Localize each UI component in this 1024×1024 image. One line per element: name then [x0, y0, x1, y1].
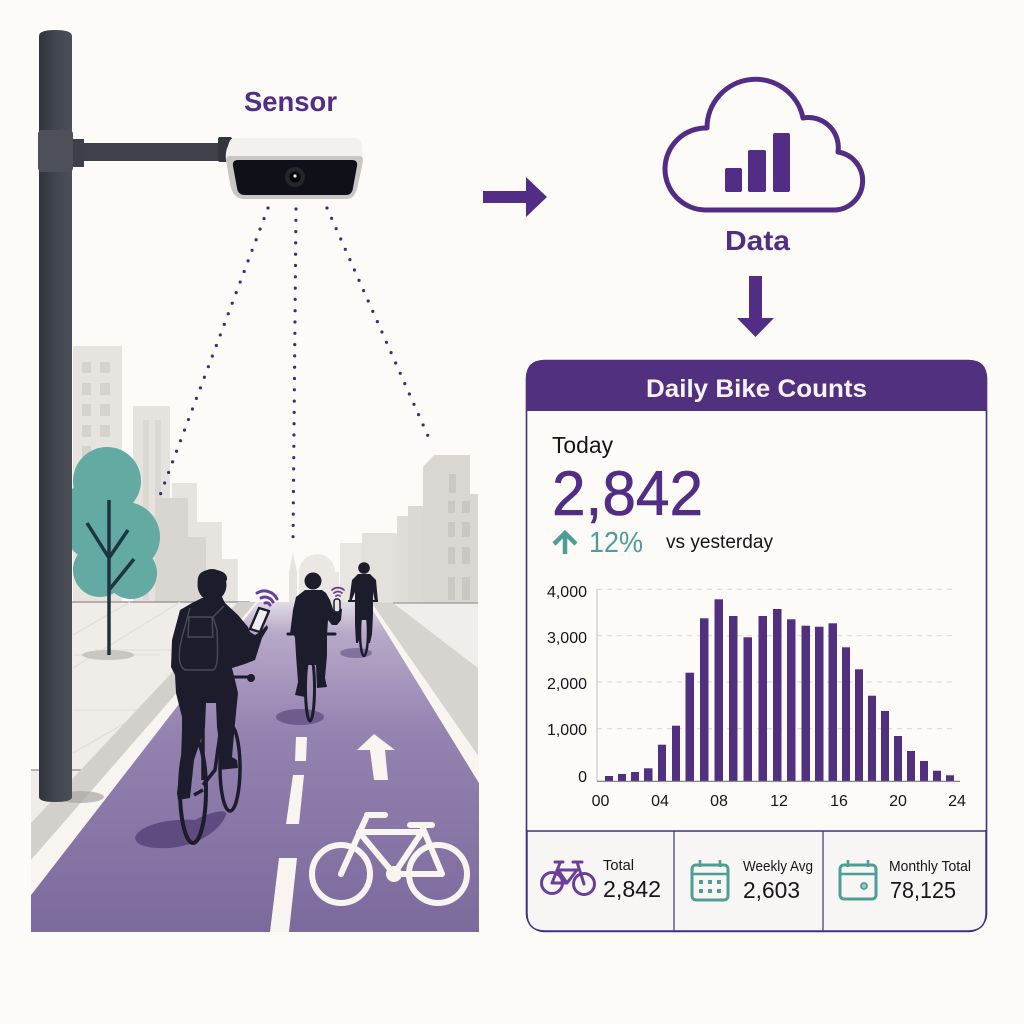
monthly total stat: 78,125	[890, 877, 956, 903]
weekly average stat: 2,603	[743, 877, 800, 903]
weekly average stat	[743, 859, 813, 903]
dashed lane divider	[270, 737, 307, 932]
data label: Data	[725, 225, 790, 256]
total stat: 2,842	[603, 876, 661, 902]
road arrow	[357, 734, 395, 780]
road bike symbol	[312, 815, 467, 903]
wifi signal large	[257, 591, 277, 605]
bike lane surface	[31, 602, 479, 932]
calendar icon: monthly	[840, 860, 876, 899]
middle cyclist with phone	[276, 572, 342, 725]
weekly average stat: Weekly Avg	[743, 859, 813, 875]
lamp pole	[38, 30, 232, 803]
hourly bar chart: 16	[830, 793, 848, 810]
today count: 2,842	[552, 459, 703, 529]
curb	[31, 602, 257, 860]
total stat: Total	[603, 858, 634, 874]
hourly bar chart: 12	[770, 793, 788, 810]
tree	[65, 447, 160, 660]
hourly bar chart: 1,000	[547, 722, 587, 739]
hourly bar chart: 3,000	[547, 630, 587, 647]
arrow: data to dashboard	[737, 276, 774, 337]
wifi signal small	[332, 588, 344, 596]
hourly bar chart: 04	[651, 793, 669, 810]
hourly bar chart: 24	[948, 793, 966, 810]
right sidewalk	[371, 602, 478, 757]
right city buildings	[289, 455, 478, 603]
trend arrow icon	[554, 533, 576, 554]
arrow: sensor to data	[483, 177, 547, 217]
comparison text: vs yesterday	[666, 532, 773, 553]
hourly bar chart: 20	[889, 793, 907, 810]
monthly total stat: Monthly Total	[889, 859, 971, 875]
left city buildings	[73, 346, 238, 602]
summary footer	[527, 831, 986, 931]
far cyclist	[340, 562, 378, 658]
lane edge stripes	[31, 602, 479, 895]
hourly bar chart: 0	[578, 769, 587, 786]
street scene illustration	[31, 346, 479, 932]
total stat	[603, 858, 661, 902]
foreground cyclist with phone	[135, 569, 269, 848]
bike icon	[542, 862, 594, 894]
sensor label: Sensor	[244, 86, 337, 117]
hourly bar chart: 08	[710, 793, 728, 810]
hourly bar chart: 4,000	[547, 584, 587, 601]
dashboard header: Daily Bike Counts	[646, 375, 867, 403]
hourly bar chart: 2,000	[547, 676, 587, 693]
left sidewalk	[31, 601, 250, 822]
today label: Today	[552, 432, 613, 458]
dashboard panel	[526, 360, 987, 932]
cloud data icon	[665, 79, 863, 210]
trend percent: 12%	[589, 527, 643, 559]
dashboard header	[526, 360, 987, 411]
monthly total stat	[889, 859, 971, 903]
calendar icon: weekly	[692, 860, 728, 900]
backpack	[179, 606, 224, 670]
hourly bar chart: 00	[592, 793, 610, 810]
hourly bar chart	[547, 584, 966, 810]
sensor device	[226, 138, 363, 199]
sensor signal dotted lines	[159, 208, 432, 542]
